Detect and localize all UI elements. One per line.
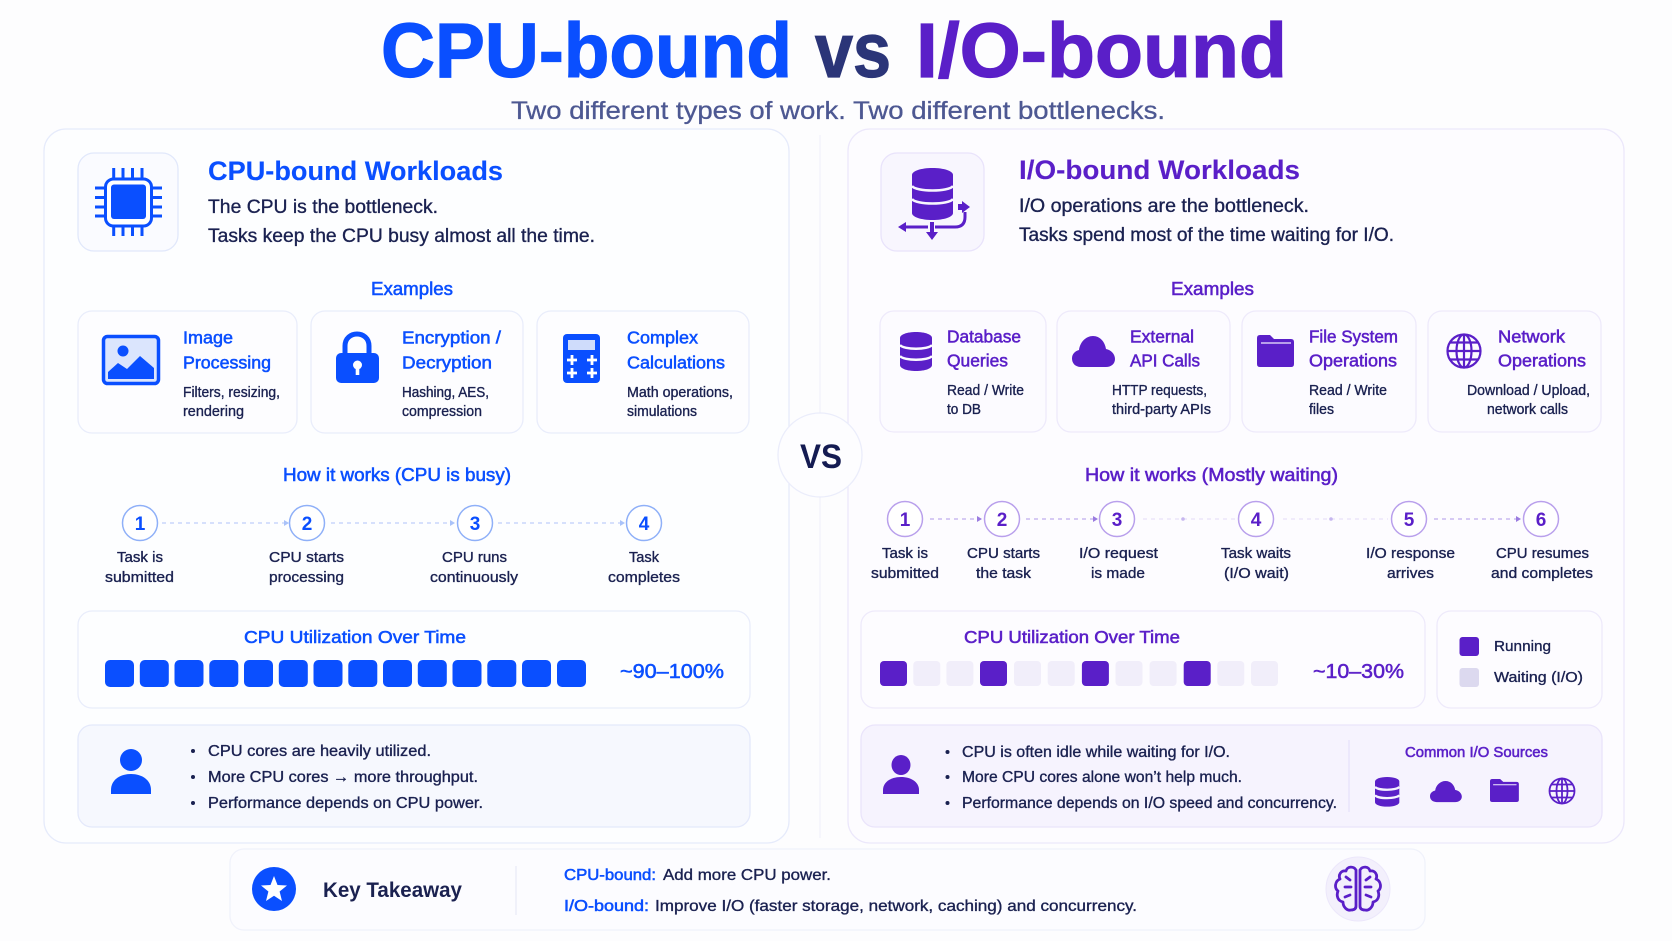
- text: file system operations: Operations: [1309, 350, 1397, 370]
- description: Tasks spend most of the time waiting for I/O.: [1019, 224, 1394, 246]
- step 6: [1491, 502, 1593, 582]
- text: image processing: [183, 328, 280, 420]
- text: encryption: Encryption /: [402, 328, 501, 348]
- text: network operations: Download / Upload,: [1467, 383, 1590, 399]
- step 1: [871, 502, 939, 582]
- description: I/O operations are the bottleneck.: [1019, 195, 1309, 217]
- step 4: 4: [639, 514, 650, 535]
- icon: cloud: [1430, 781, 1462, 802]
- text: encryption: compression: [402, 404, 482, 420]
- chart: CPU utilization: ~10–30%: [1313, 660, 1404, 683]
- icon: database: [1375, 777, 1399, 807]
- text: network operations: Operations: [1498, 350, 1586, 370]
- legend: Waiting (I/O): [1494, 669, 1583, 686]
- step 2: [967, 502, 1040, 582]
- icon: folder: [1490, 779, 1519, 802]
- text: external API calls: third-party APIs: [1112, 402, 1211, 418]
- heading: examples: Examples: [1171, 279, 1254, 299]
- step 4: (I/O wait): [1224, 565, 1289, 582]
- text: image processing: Filters, resizing,: [183, 385, 280, 401]
- icon: cloud: [1072, 336, 1115, 367]
- text: external API calls: API Calls: [1130, 350, 1200, 370]
- icon: lock: [336, 334, 379, 383]
- step 3: continuously: [430, 569, 519, 586]
- title: I/O-bound: [916, 8, 1287, 94]
- bullet list: [191, 743, 483, 812]
- bullet list: CPU cores are heavily utilized.: [208, 743, 431, 760]
- text: image processing: Image: [183, 328, 233, 348]
- step 2: the task: [976, 565, 1032, 582]
- callout: I/O notes: [861, 725, 1602, 827]
- step 4: [608, 506, 680, 586]
- step 1: submitted: [105, 569, 174, 586]
- step 2: processing: [269, 569, 344, 586]
- text: file system operations: Read / Write: [1309, 383, 1387, 399]
- common I/O sources: Common I/O Sources: [1405, 745, 1548, 761]
- text: complex calculations: Calculations: [627, 352, 725, 372]
- title: CPU-bound: [381, 8, 792, 94]
- icon: person: [883, 755, 919, 794]
- text: network operations: network calls: [1487, 402, 1568, 418]
- heading: how it works: How it works (Mostly waiting): [1085, 465, 1338, 485]
- step 1: Task is: [117, 549, 163, 566]
- step 5: [1366, 502, 1455, 582]
- step 6: CPU resumes: [1496, 545, 1589, 562]
- step connectors: [930, 516, 1521, 522]
- chart: CPU utilization: CPU Utilization Over Time: [244, 627, 466, 647]
- step connectors: [162, 520, 625, 526]
- text: encryption: Hashing, AES,: [402, 385, 489, 401]
- step 3: is made: [1091, 565, 1145, 582]
- bullet list: [946, 744, 1337, 812]
- step 4: completes: [608, 569, 680, 586]
- card: network operations: [1428, 311, 1601, 432]
- text: external API calls: [1112, 326, 1211, 418]
- subtitle: Two different types of work. Two different bottlenecks.: [511, 97, 1165, 125]
- text: file system operations: [1309, 326, 1398, 418]
- text: complex calculations: Math operations,: [627, 385, 733, 401]
- chart: CPU utilization: CPU Utilization Over Time: [964, 627, 1180, 647]
- step 6: and completes: [1491, 565, 1593, 582]
- takeaway: CPU-bound: CPU-bound:: [564, 867, 656, 884]
- text: database queries: to DB: [947, 402, 981, 418]
- step 2: CPU starts: [269, 549, 344, 566]
- title: [381, 8, 1287, 94]
- icon: database with arrows: [881, 153, 984, 251]
- icon: CPU chip: [78, 153, 178, 251]
- text: image processing: rendering: [183, 404, 244, 420]
- text: external API calls: External: [1130, 326, 1194, 346]
- description: Tasks keep the CPU busy almost all the time.: [208, 225, 595, 247]
- step 3: [430, 506, 519, 586]
- step 4: 4: [1251, 510, 1262, 531]
- text: file system operations: File System: [1309, 326, 1398, 346]
- bullet list: Performance depends on I/O speed and concurrency.: [962, 795, 1337, 812]
- step 2: [269, 506, 344, 586]
- VS badge: [778, 413, 862, 497]
- card: complex calculations: [537, 311, 749, 433]
- step 5: 5: [1404, 510, 1415, 531]
- text: complex calculations: [627, 328, 733, 420]
- heading: CPU-bound workloads: CPU-bound Workloads: [208, 156, 503, 186]
- step 5: arrives: [1387, 565, 1434, 582]
- text: network operations: [1467, 326, 1590, 418]
- text: encryption: [402, 328, 501, 420]
- takeaway: CPU-bound: Add more CPU power.: [663, 867, 831, 884]
- card: encryption: [311, 311, 523, 433]
- icon: person: [111, 749, 151, 794]
- card: image processing: [78, 311, 297, 433]
- text: database queries: [947, 326, 1024, 418]
- bullet list: More CPU cores → more throughput.: [208, 769, 478, 786]
- text: file system operations: files: [1309, 402, 1334, 418]
- icon: globe: [1448, 334, 1480, 368]
- card: database queries: [880, 311, 1046, 432]
- step 1: 1: [135, 514, 146, 535]
- icon: image: [104, 336, 158, 384]
- takeaway: I/O-bound: Improve I/O (faster storage, network, caching) and concurrency.: [655, 898, 1137, 915]
- description: [1019, 195, 1394, 246]
- icon: star: [252, 867, 296, 911]
- step 2: CPU starts: [967, 545, 1040, 562]
- text: network operations: Network: [1498, 326, 1565, 346]
- icon: calculator: [563, 334, 600, 383]
- icon: folder: [1257, 335, 1294, 367]
- common I/O sources: [1375, 745, 1574, 807]
- takeaway: I/O-bound: I/O-bound:: [564, 898, 649, 915]
- text: complex calculations: Complex: [627, 328, 698, 348]
- icon: globe: [1550, 778, 1574, 804]
- description: [208, 196, 595, 247]
- text: database queries: Queries: [947, 350, 1008, 370]
- heading: key takeaway: Key Takeaway: [323, 879, 462, 902]
- step 4: Task: [629, 549, 659, 566]
- bullet list: Performance depends on CPU power.: [208, 795, 483, 812]
- icon: brain: [1326, 857, 1390, 921]
- text: external API calls: HTTP requests,: [1112, 383, 1207, 399]
- callout: CPU notes: [78, 725, 750, 827]
- legend: Running: [1494, 638, 1551, 655]
- chart: CPU utilization: [861, 611, 1425, 708]
- utilization bars: [105, 660, 586, 687]
- card: external API calls: [1057, 311, 1230, 432]
- step 4: Task waits: [1221, 545, 1291, 562]
- step 3: 3: [470, 514, 480, 535]
- step 3: I/O request: [1079, 545, 1159, 562]
- text: database queries: Read / Write: [947, 383, 1024, 399]
- heading: how it works: How it works (CPU is busy): [283, 465, 511, 485]
- chart: CPU utilization: ~90–100%: [620, 660, 724, 683]
- VS badge: VS: [800, 438, 842, 476]
- text: encryption: Decryption: [402, 352, 492, 372]
- bullet list: CPU is often idle while waiting for I/O.: [962, 744, 1230, 761]
- chart: CPU utilization: [78, 611, 750, 708]
- description: The CPU is the bottleneck.: [208, 196, 438, 218]
- card: file system operations: [1242, 311, 1416, 432]
- step 3: CPU runs: [442, 549, 507, 566]
- panel: I/O-bound workloads: [848, 129, 1624, 843]
- step 1: Task is: [882, 545, 928, 562]
- step 2: 2: [302, 514, 312, 535]
- title: vs: [815, 8, 891, 94]
- step 2: 2: [997, 510, 1007, 531]
- key takeaway bar: [230, 849, 1425, 930]
- step 1: submitted: [871, 565, 939, 582]
- step 3: [1079, 502, 1159, 582]
- step 6: 6: [1536, 510, 1546, 531]
- text: complex calculations: simulations: [627, 404, 697, 420]
- step 1: [105, 506, 174, 586]
- text: image processing: Processing: [183, 352, 271, 372]
- bullet list: More CPU cores alone won’t help much.: [962, 769, 1242, 786]
- step 4: [1221, 502, 1291, 582]
- text: database queries: Database: [947, 326, 1021, 346]
- utilization bars: [880, 661, 1278, 686]
- step 5: I/O response: [1366, 545, 1455, 562]
- icon: database: [900, 332, 932, 371]
- step 3: 3: [1112, 510, 1122, 531]
- legend: [1437, 611, 1602, 708]
- takeaway: CPU-bound: [564, 867, 831, 884]
- panel: CPU-bound workloads: [44, 129, 789, 843]
- step 1: 1: [900, 510, 911, 531]
- heading: examples: Examples: [371, 279, 453, 299]
- heading: I/O-bound workloads: I/O-bound Workloads: [1019, 155, 1300, 185]
